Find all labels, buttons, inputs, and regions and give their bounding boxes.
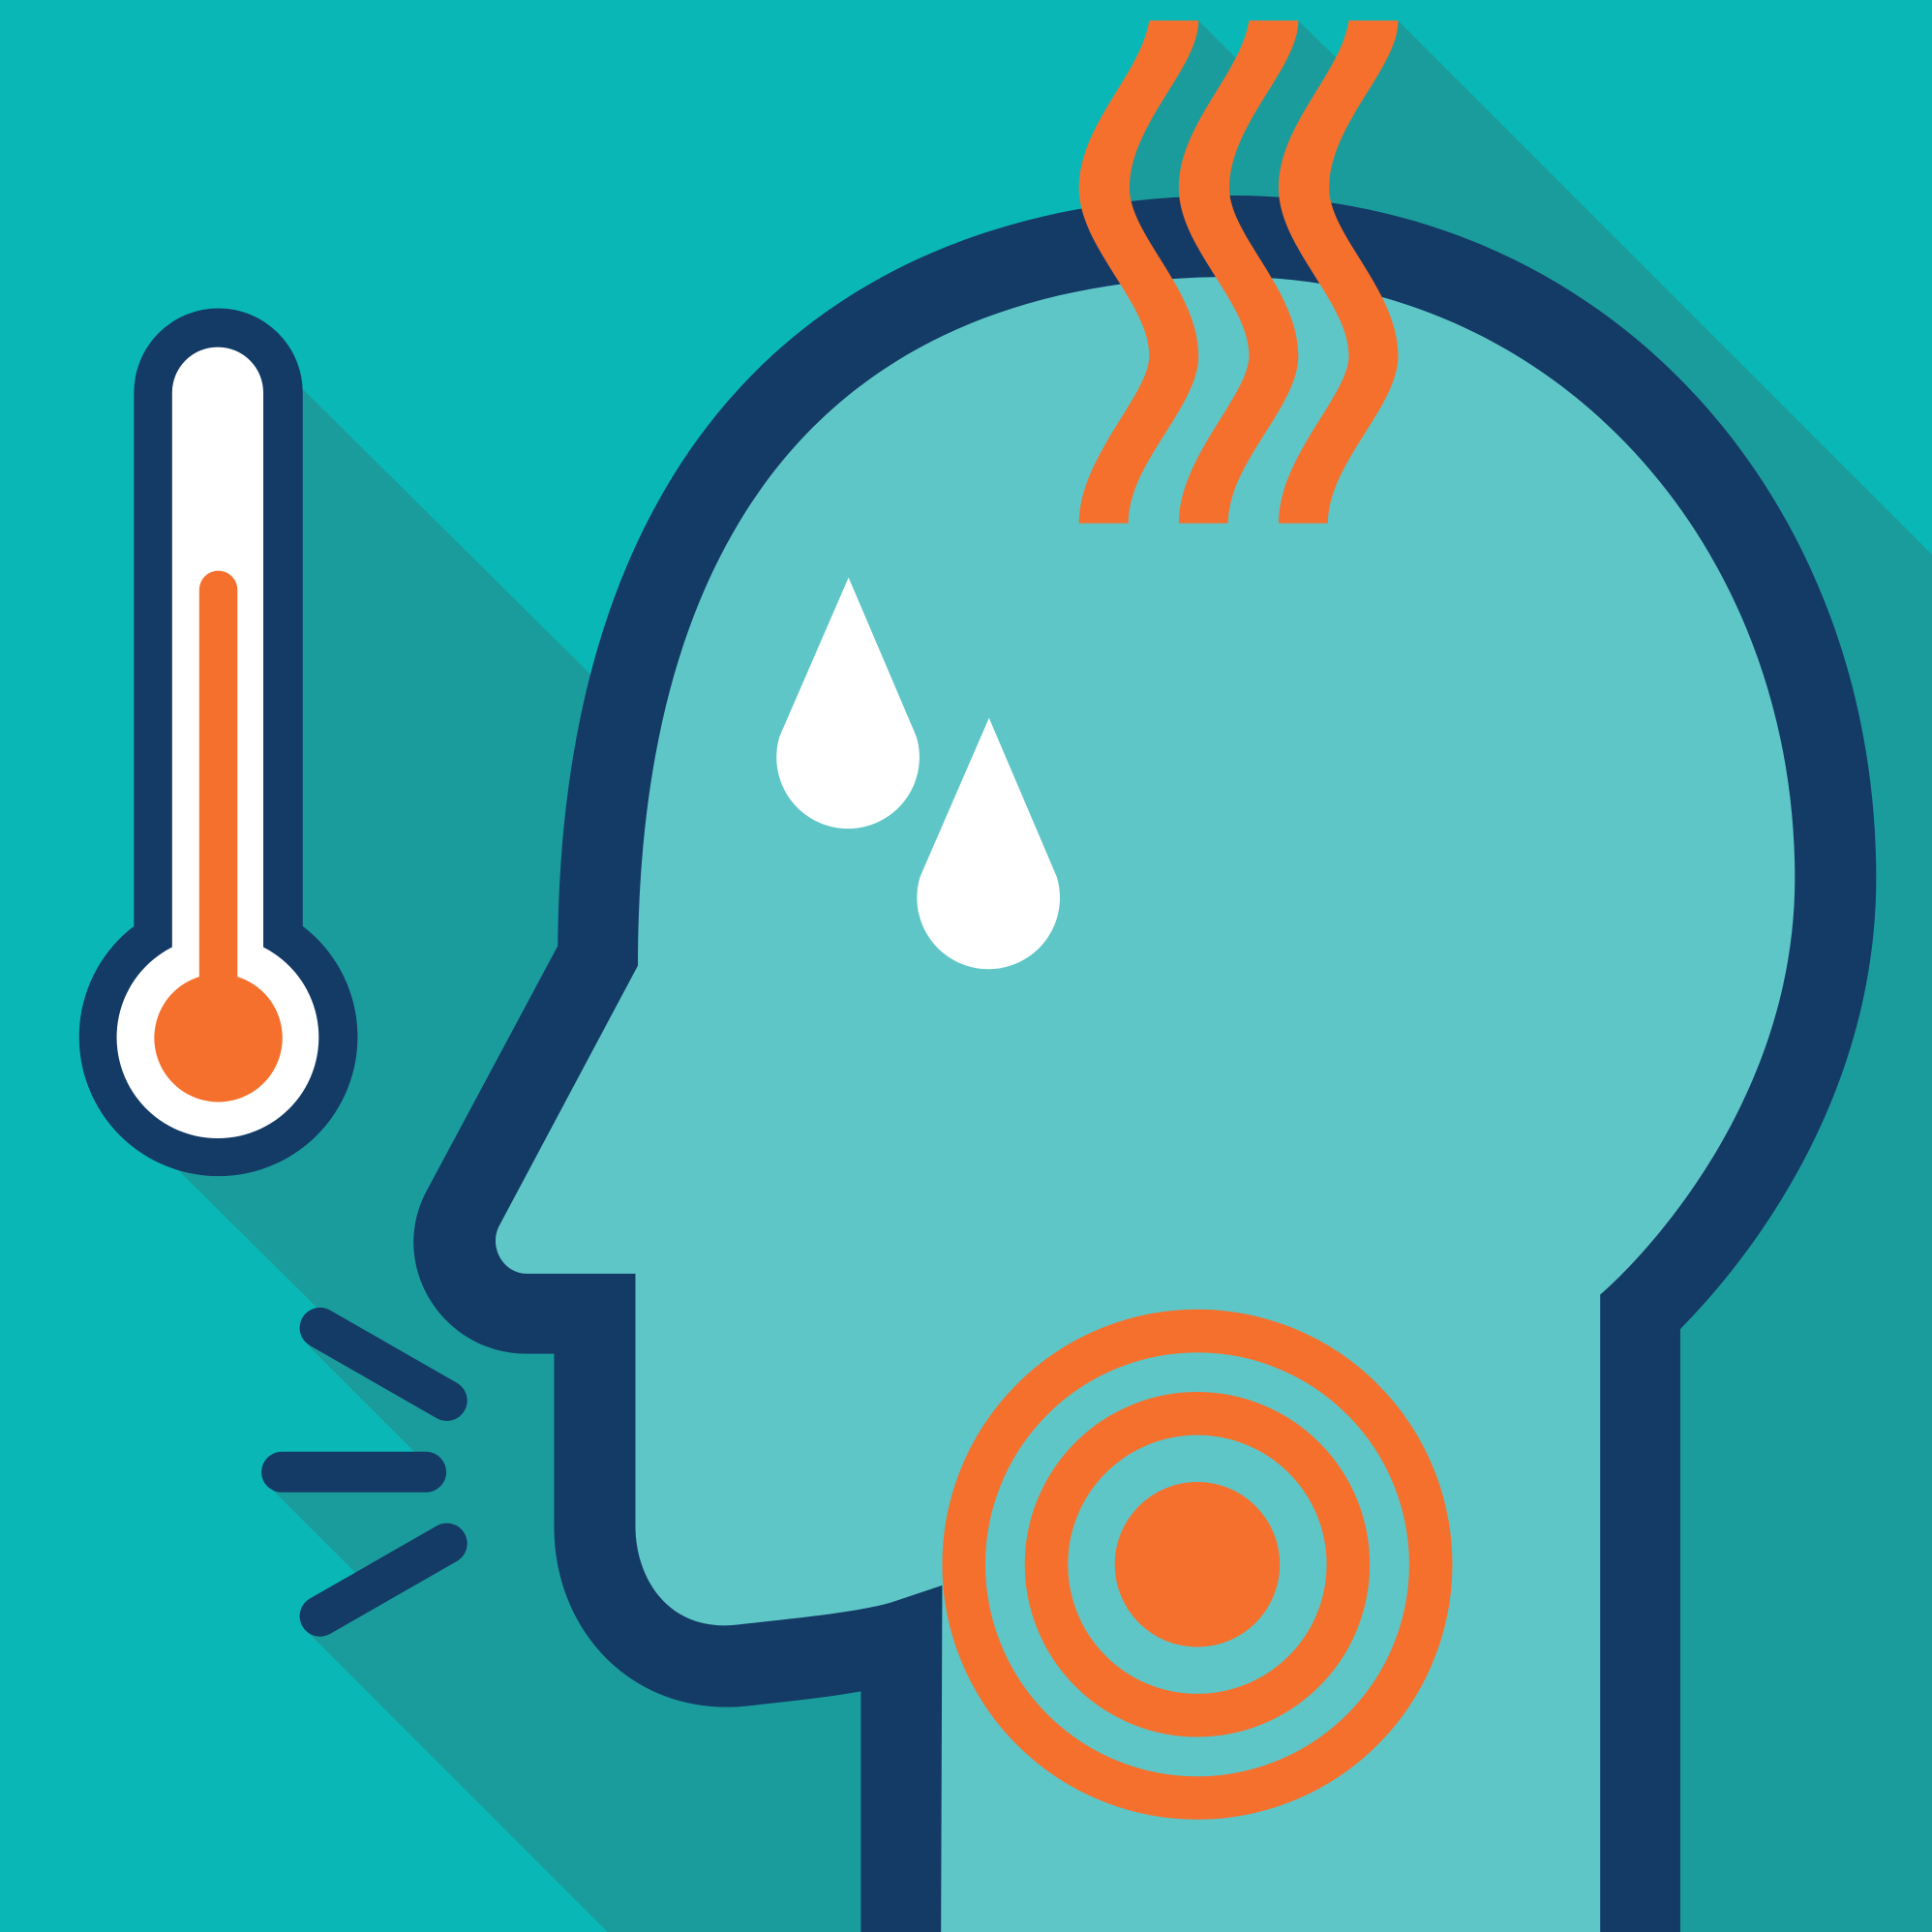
sweat drop 1 bbox=[776, 578, 920, 829]
icon: cough lines bbox=[282, 1328, 447, 1616]
heat wave 3 bbox=[1279, 20, 1398, 524]
head silhouette bbox=[413, 196, 1876, 1932]
outer ring bbox=[964, 1331, 1431, 1798]
mercury column bbox=[154, 571, 283, 1102]
thermometer glass bbox=[117, 347, 318, 1138]
core bbox=[1115, 1482, 1280, 1647]
sweat drop 2 bbox=[917, 718, 1060, 969]
head outline bbox=[413, 196, 1876, 1932]
middle ring bbox=[1046, 1413, 1348, 1715]
head fill bbox=[496, 277, 1795, 1932]
heat wave 2 bbox=[1179, 20, 1298, 524]
icon: heat waves bbox=[1079, 20, 1398, 524]
icon: thermometer bbox=[79, 308, 357, 1176]
icon: sweat drops bbox=[776, 578, 1060, 969]
heat wave 1 bbox=[1079, 20, 1198, 524]
cough line upper bbox=[320, 1328, 447, 1401]
icon: sore throat target bbox=[964, 1331, 1431, 1798]
thermometer casing bbox=[79, 308, 357, 1176]
cough line lower bbox=[320, 1544, 447, 1616]
cough line middle bbox=[282, 1456, 426, 1488]
